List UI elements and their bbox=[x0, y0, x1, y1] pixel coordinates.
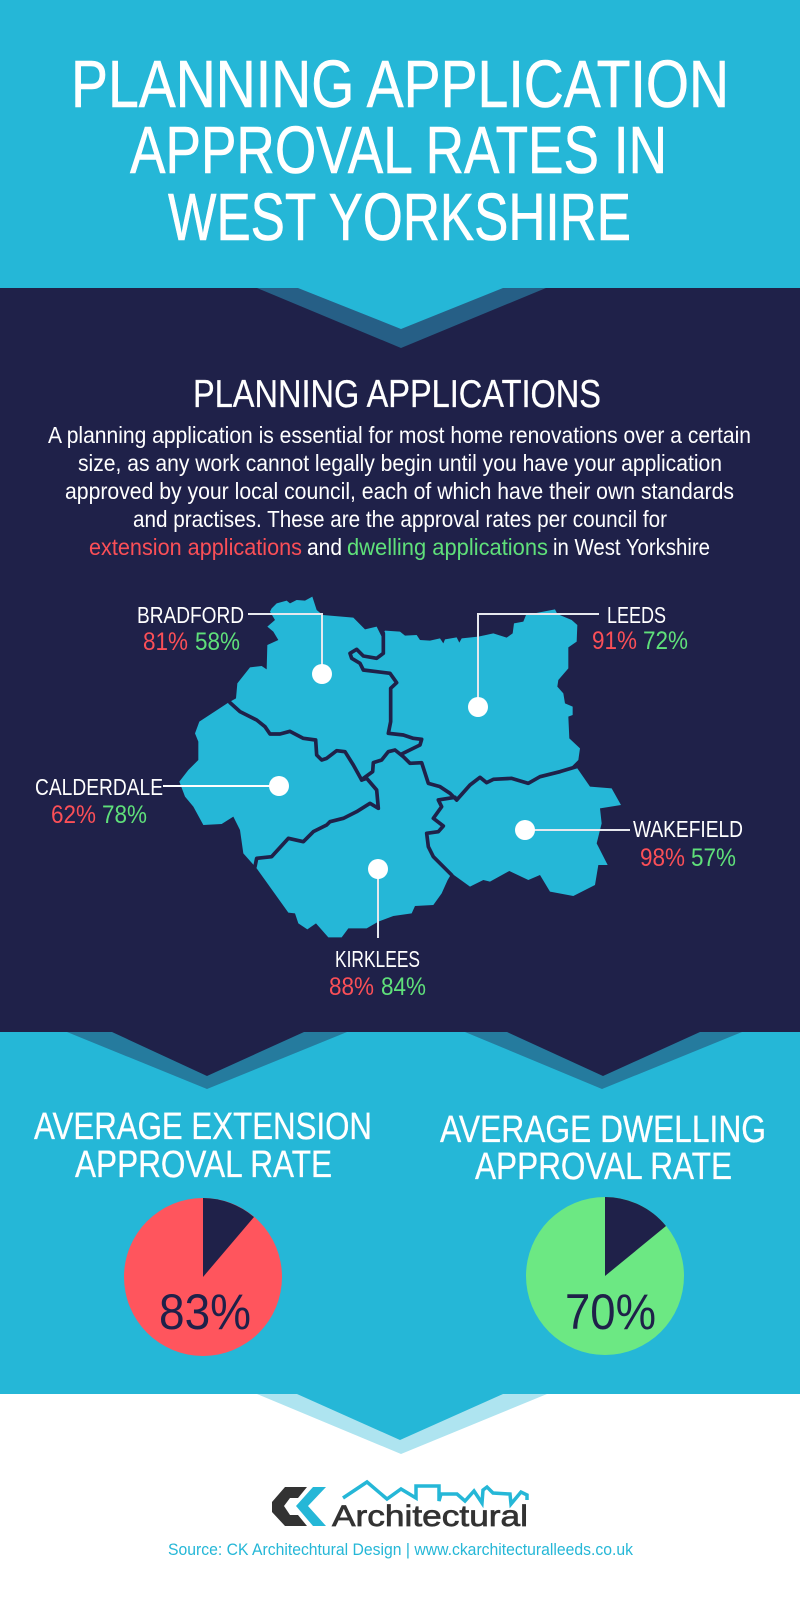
callout: Bradford: 81% bbox=[143, 628, 188, 656]
title bbox=[71, 47, 729, 255]
arrow: footer chevron bbox=[257, 1394, 547, 1454]
chart: extension pie 83% bbox=[124, 1198, 282, 1356]
callout: Leeds bbox=[468, 602, 688, 717]
map: West Yorkshire councils bbox=[179, 597, 621, 937]
callout: Kirklees: KIRKLEES bbox=[335, 946, 420, 972]
heading: average dwelling approval rate bbox=[440, 1109, 766, 1188]
arrow: extension chevron bbox=[67, 1032, 347, 1089]
callout: Kirklees: 88% bbox=[329, 973, 374, 1001]
logo: CK Architectural bbox=[272, 1482, 528, 1533]
chart: dwelling pie 70% bbox=[526, 1197, 684, 1355]
callout: Bradford: BRADFORD bbox=[137, 602, 244, 628]
panel: header background bbox=[0, 0, 800, 288]
callout: Calderdale: CALDERDALE bbox=[35, 774, 163, 800]
text block: introduction bbox=[48, 422, 751, 560]
logo: CK Architectural: Architectural bbox=[332, 1500, 528, 1533]
callout: Calderdale: 78% bbox=[102, 801, 147, 829]
callout: Bradford bbox=[137, 602, 332, 684]
callout: Leeds: 72% bbox=[643, 627, 688, 655]
title: APPROVAL RATES IN bbox=[130, 113, 667, 188]
text block: introduction: dwelling applications bbox=[347, 534, 548, 560]
callout: Bradford: 58% bbox=[195, 628, 240, 656]
chart: extension pie 83%: 83% bbox=[159, 1284, 251, 1340]
callout: Wakefield: 98% bbox=[640, 844, 685, 872]
text block: introduction: approved by your local council, each of which have their own standards bbox=[65, 478, 734, 504]
text block: introduction: A planning application is essential for most home renovations over a certain bbox=[48, 422, 751, 448]
heading: average dwelling approval rate: APPROVAL RATE bbox=[475, 1146, 732, 1188]
callout: Calderdale: 62% bbox=[51, 801, 96, 829]
title: WEST YORKSHIRE bbox=[168, 180, 631, 255]
heading: planning applications: PLANNING APPLICATIONS bbox=[193, 373, 601, 416]
text block: introduction: and practises. These are the approval rates per council for bbox=[133, 506, 667, 532]
callout: Leeds: LEEDS bbox=[607, 602, 666, 628]
callout: Wakefield: 57% bbox=[691, 844, 736, 872]
callout: Leeds: 91% bbox=[592, 627, 637, 655]
text block: introduction: in West Yorkshire bbox=[553, 534, 710, 560]
text block: introduction: and bbox=[307, 534, 342, 560]
text block: introduction: size, as any work cannot legally begin until you have your application bbox=[78, 450, 722, 476]
panel: map section background bbox=[0, 288, 800, 1032]
text block: introduction: extension applications bbox=[89, 534, 302, 560]
callout: Wakefield: WAKEFIELD bbox=[633, 816, 743, 842]
callout: Kirklees: 84% bbox=[381, 973, 426, 1001]
callout: Wakefield bbox=[515, 816, 743, 872]
heading: average extension approval rate bbox=[34, 1106, 372, 1186]
heading: average extension approval rate: APPROVAL RATE bbox=[75, 1144, 332, 1186]
callout: Calderdale bbox=[35, 774, 289, 829]
arrow: header chevron bbox=[257, 288, 546, 348]
source line: Source: CK Architechtural Design | www.ckarchitecturalleeds.co.uk bbox=[168, 1540, 633, 1559]
heading: average extension approval rate: AVERAGE EXTENSION bbox=[34, 1106, 372, 1148]
panel: averages section background bbox=[0, 1032, 800, 1394]
arrow: dwelling chevron bbox=[465, 1032, 742, 1089]
panel: footer background bbox=[0, 1394, 800, 1600]
chart: dwelling pie 70%: 70% bbox=[565, 1284, 656, 1340]
callout: Kirklees bbox=[329, 859, 426, 1001]
